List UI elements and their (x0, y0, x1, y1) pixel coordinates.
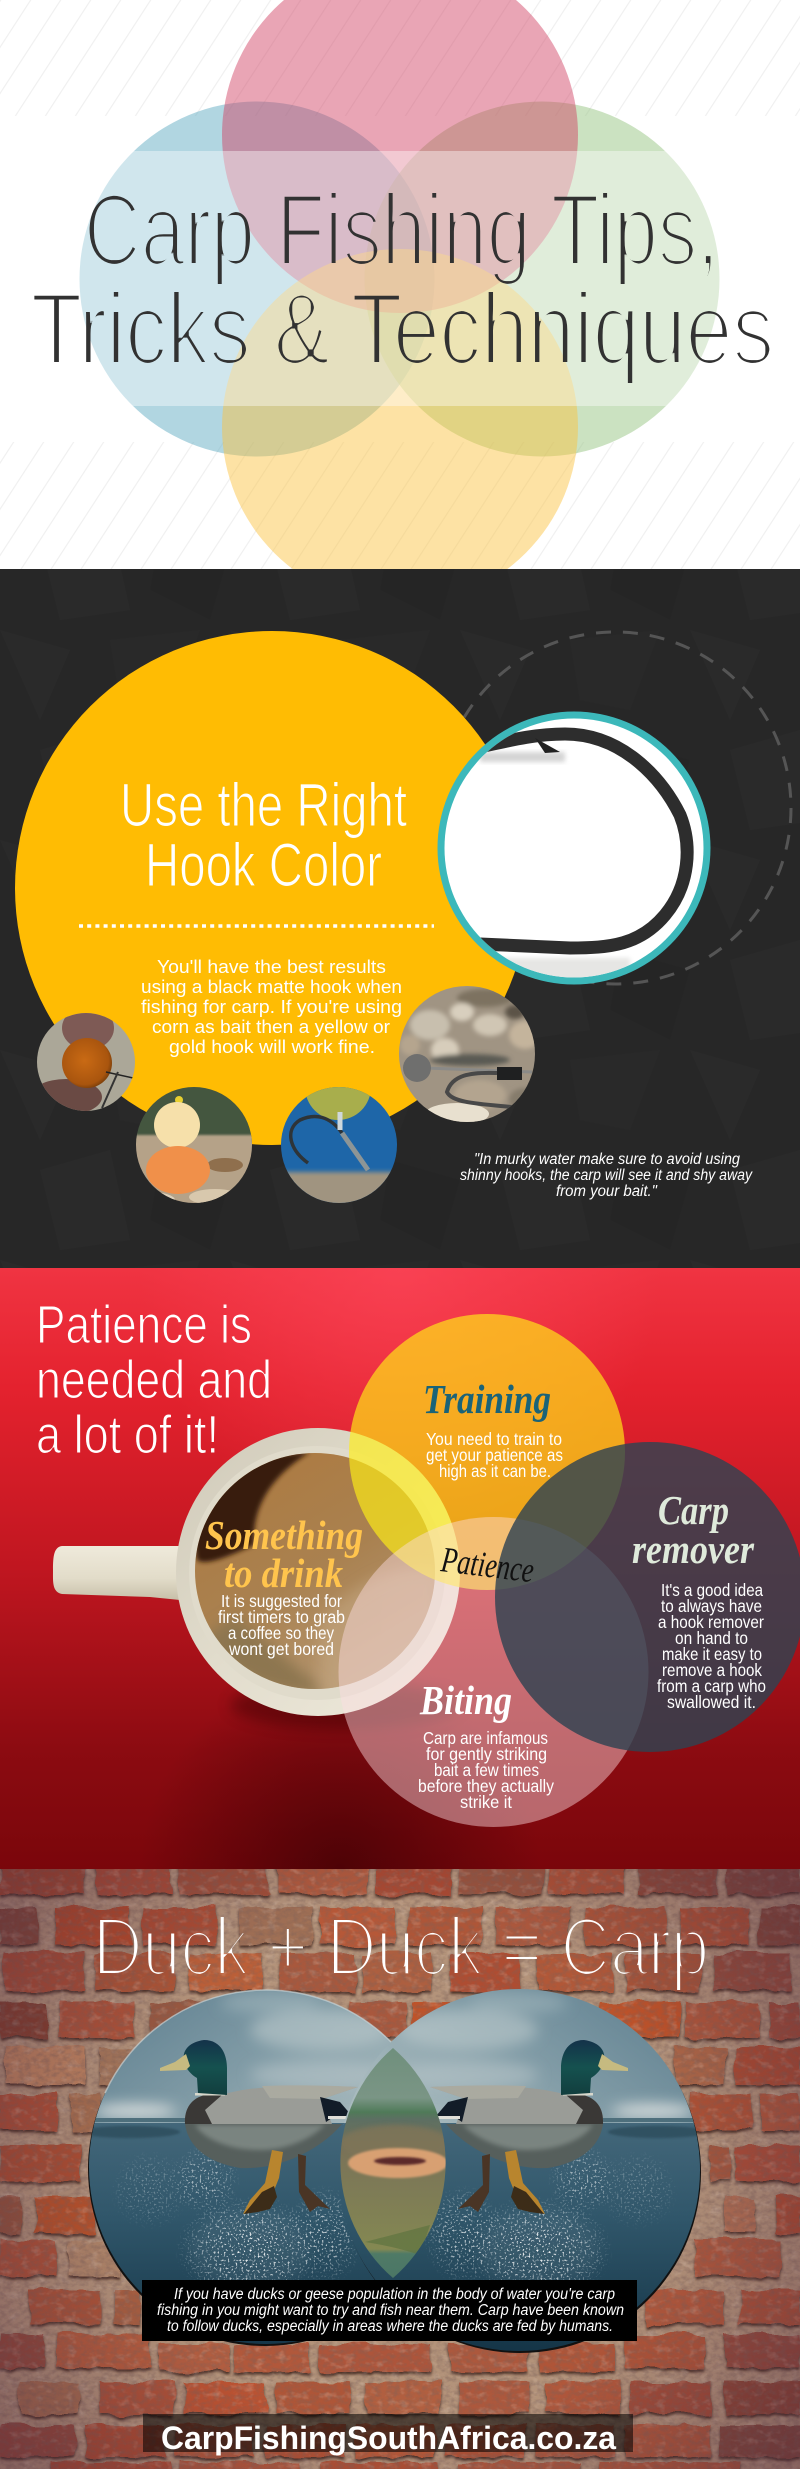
label: biting: strike it (460, 1792, 512, 1812)
label: training: You need to train to (426, 1429, 562, 1449)
hook advice text: You'll have the best results (157, 956, 386, 977)
caption box: fishing in you might want to try and fish near them. Carp have been known (157, 2302, 624, 2319)
section: dark hook panel background (0, 569, 800, 1268)
lens: carp face (340, 2048, 446, 2278)
quote (460, 1151, 753, 1200)
label: carp remover: remove a hook (662, 1660, 762, 1680)
label: training (423, 1376, 563, 1481)
hook advice text: corn as bait then a yellow or (152, 1016, 390, 1037)
circle photo: right duck (323, 1985, 708, 2363)
label: carp remover (632, 1487, 766, 1712)
yellow circle (15, 631, 529, 1145)
label: carp remover: on hand to (675, 1628, 748, 1648)
label: biting: before they actually (418, 1776, 554, 1796)
label: something to drink: Something (205, 1512, 363, 1558)
label: carp remover: make it easy to (662, 1644, 762, 1664)
caption box: to follow ducks, especially in areas where the ducks are fed by humans. (167, 2318, 613, 2335)
hook advice text: fishing for carp. If you're using (141, 996, 402, 1017)
label: something to drink: wont get bored (228, 1639, 334, 1659)
label: biting: Carp are infamous (423, 1728, 548, 1748)
circle photo: left duck (88, 1989, 392, 2346)
footer url banner: CarpFishingSouthAfrica.co.za (161, 2420, 616, 2456)
label: biting: Biting (419, 1677, 512, 1723)
label: training: high as it can be. (439, 1461, 551, 1481)
heading: patience: a lot of it! (36, 1405, 219, 1465)
label: training: Training (423, 1376, 551, 1422)
dotted divider (79, 924, 434, 928)
caption box (142, 2280, 637, 2341)
hook advice text (141, 956, 402, 1057)
label: carp remover: from a carp who (657, 1676, 766, 1696)
hook photo circle (438, 712, 710, 984)
coffee mug (53, 1428, 460, 1729)
section: brick wall background (0, 1860, 800, 2469)
circle: carp remover (495, 1442, 800, 1752)
center label: patience: Patience (438, 1539, 536, 1590)
label: carp remover: a hook remover (658, 1612, 764, 1632)
title (31, 173, 774, 386)
caption box: If you have ducks or geese population in the body of water you're carp (174, 2286, 615, 2303)
section: red patience panel background (0, 1268, 800, 1869)
label: carp remover: remover (632, 1526, 755, 1572)
label: carp remover: swallowed it. (667, 1692, 756, 1712)
photo: cream and orange bait (136, 1087, 252, 1203)
label: something to drink: to drink (224, 1550, 343, 1596)
label: something to drink: It is suggested for (221, 1591, 342, 1611)
photo: hook on blue (281, 1087, 397, 1203)
quote: from your bait." (556, 1183, 658, 1200)
circle: biting (338, 1517, 648, 1827)
section: header background (0, 0, 800, 569)
heading: patience (36, 1295, 272, 1465)
heading: Use the Right Hook Color: Use the Right (120, 771, 407, 839)
label: something to drink: first timers to grab (218, 1607, 345, 1627)
label: biting (418, 1677, 554, 1812)
four overlapping circles (80, 0, 720, 605)
circle: training (349, 1314, 625, 1590)
label: something to drink: a coffee so they (228, 1623, 334, 1643)
heading: Use the Right Hook Color: Hook Color (145, 831, 382, 899)
quote: shinny hooks, the carp will see it and shy away (460, 1167, 753, 1184)
hook advice text: using a black matte hook when (141, 976, 402, 997)
label: carp remover: to always have (661, 1596, 762, 1616)
heading: patience: needed and (36, 1350, 272, 1410)
label: biting: for gently striking (426, 1744, 547, 1764)
hook advice text: gold hook will work fine. (169, 1036, 375, 1057)
heading: patience: Patience is (36, 1295, 252, 1355)
label: biting: bait a few times (434, 1760, 539, 1780)
quote: "In murky water make sure to avoid using (474, 1151, 740, 1168)
label: something to drink (205, 1512, 363, 1659)
photo: orange bait in fingers (37, 1013, 135, 1111)
photo: hook on pebbles (399, 986, 535, 1122)
label: carp remover: It's a good idea (661, 1580, 763, 1600)
heading: Use the Right Hook Color (120, 771, 407, 899)
label: training: get your patience as (426, 1445, 563, 1465)
dashed ring (439, 632, 791, 984)
label: carp remover: Carp (658, 1487, 729, 1533)
